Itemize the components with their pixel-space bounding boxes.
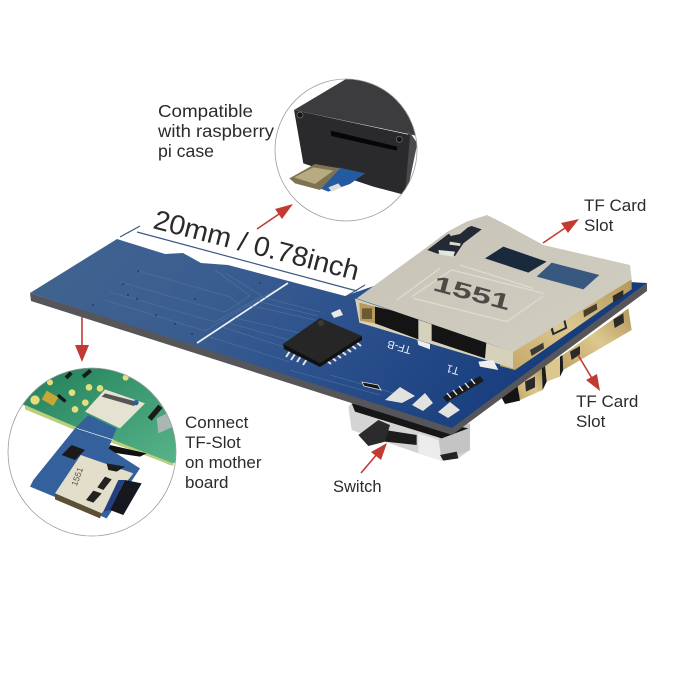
arrow: switch [361,443,387,473]
case top face [294,79,416,136]
label: compatible: with raspberry [157,121,274,141]
label: connect: on mother [185,453,262,472]
label: connect: TF-Slot [185,433,241,452]
label: upper TF card slot: TF Card [584,196,646,215]
case front face [294,110,410,195]
case right side [406,130,416,188]
slide switch [348,402,470,461]
arrow: upper slot [543,219,579,243]
metal side wall [500,279,632,370]
embossed lines [397,265,543,322]
dimension line [120,226,365,297]
solder pads [385,387,460,418]
arrow: lower slot [578,355,600,391]
label: compatible: Compatible [158,101,253,121]
top metal face [357,215,632,352]
inset circle: mother board connection [8,363,177,536]
green motherboard [20,363,177,465]
slot latch notch [427,225,482,257]
label: switch: Switch [333,478,382,496]
yellow pads [30,375,129,413]
dimension label: 20mm / 0.78inch [151,204,363,286]
label: lower TF card slot: Slot [576,412,606,431]
white stripe [197,283,288,343]
inserted adapter [320,167,365,192]
blue circuit board: T1 [445,362,461,377]
window 2 [537,263,599,289]
black card [110,480,142,515]
inset circle: mother board connection: 1551 [69,466,85,487]
circuit traces [105,270,400,395]
label: compatible: pi case [158,141,214,161]
silkscreen labels: TF-B [386,337,413,356]
label: connect: Connect [185,413,249,432]
upper TF card slot [355,215,632,370]
board edge [30,283,647,435]
blue circuit board [30,239,647,435]
adapter chip [62,445,85,460]
arrow: to case inset [257,204,293,229]
window 1 [485,247,547,273]
onboard slot [85,389,145,428]
front opening row [355,298,513,368]
board top surface [30,239,647,428]
card slot opening [331,131,397,151]
shadow under adapter [107,445,147,457]
lower TF card slot [498,308,632,404]
chip [283,309,362,367]
stamped model number: 1551 [431,271,513,315]
small parts [362,376,484,402]
label: upper TF card slot: Slot [584,216,614,235]
via dots [92,270,261,335]
inset circle: raspberry pi case [275,77,427,221]
arrow: to mother board inset [75,317,89,362]
label: connect: board [185,473,228,492]
components [42,369,162,421]
label: lower TF card slot: TF Card [576,392,638,411]
adapter slot [55,455,133,513]
adapter blue board [30,415,140,518]
